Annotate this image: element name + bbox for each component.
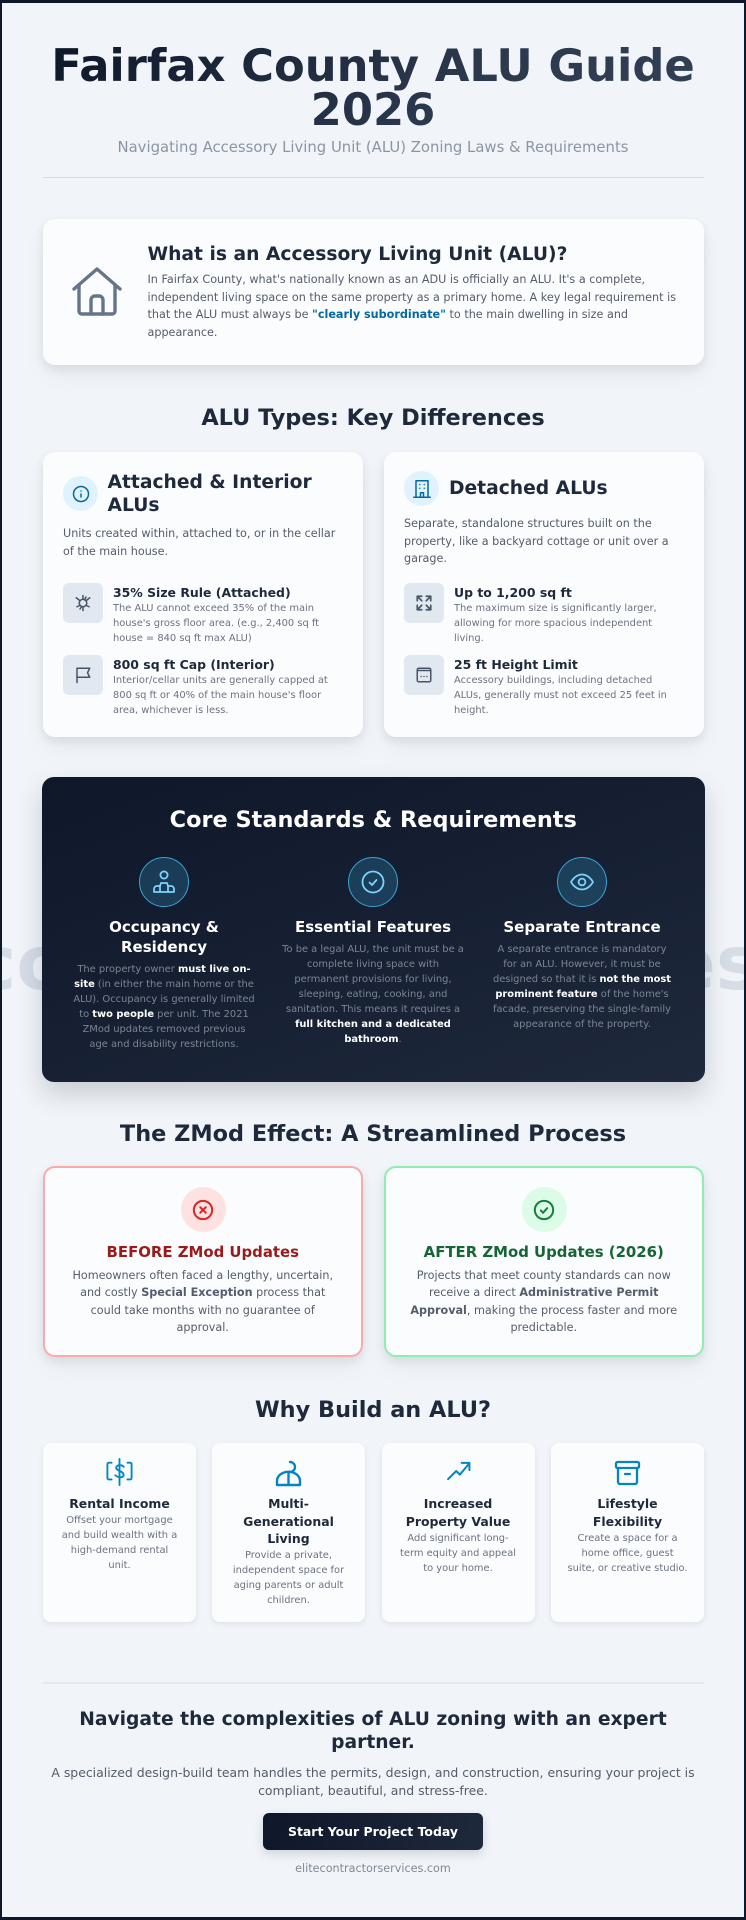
column: essential features [282,857,464,1045]
card text: approval. [177,1321,229,1334]
rule text [113,675,328,716]
rule text: living. [454,633,484,644]
heading: Core Standards & Requirements [170,807,577,833]
benefit text: Create a space for a [577,1533,678,1544]
benefit card: rental income [43,1443,196,1622]
panel: attached and interior ALUs [43,452,362,737]
rule title: 800 sq ft Cap (Interior) [113,657,275,672]
column title [109,918,219,956]
card text: could take months with no guarantee of [91,1304,315,1316]
column text: full kitchen and a dedicated [295,1019,451,1030]
rule text: 800 sq ft or 40% of the main house's floor [113,690,321,701]
benefit title [593,1496,662,1528]
heading: ZMod effect: The ZMod Effect: A Streamlined Process [120,1121,626,1147]
heading: Attached & Interior [108,472,312,493]
benefit title [406,1496,510,1528]
benefit text: Add significant long- [407,1533,509,1544]
panel: before ZMod [42,1166,363,1357]
benefit text: term equity and appeal [400,1548,516,1559]
column text: A separate entrance is mandatory [498,944,666,955]
column text: to two people per unit. The 2021 [79,1009,249,1020]
benefit text: suite, or creative studio. [568,1563,687,1574]
description: Separate, standalone structures built on the [404,517,652,530]
call to action heading: partner. [331,1732,415,1753]
benefit text [62,1515,177,1571]
benefit title: Rental Income [69,1496,170,1511]
heading: why build: Why Build an ALU? [255,1397,491,1423]
title [51,38,695,136]
column text: sleeping, eating, cooking, and [299,989,447,1000]
column text: To be a legal ALU, the unit must be a [282,944,464,955]
panel: what is an ALU [43,219,704,365]
card text: Approval, making the process faster and more [410,1304,677,1316]
benefit title: Lifestyle [597,1496,658,1511]
benefit text: unit. [108,1560,131,1571]
description: garage. [404,552,447,565]
rule title: 25 ft Height Limit [454,657,578,672]
rule: interior cap [63,655,328,716]
benefit text: aging parents or adult [234,1580,343,1591]
description: appearance. [148,326,217,338]
rule text [454,603,657,644]
heading: ALUs [108,494,160,516]
rule title: Up to 1,200 sq ft [454,585,572,600]
card text: Homeowners often faced a lengthy, uncertain, [72,1268,333,1282]
column text: age and disability restrictions. [89,1039,239,1050]
description: of the main house. [63,544,168,558]
heading [108,472,312,516]
call to action heading: Navigate the complexities of ALU zoning with an expert [79,1709,667,1730]
description [404,517,669,565]
icon: eye [557,857,607,907]
heading: ALU types: ALU Types: Key Differences [201,405,545,431]
benefit title: Multi- [268,1496,309,1511]
rule text: height. [454,705,489,716]
rule: size rule [63,583,319,644]
rule text: The maximum size is significantly larger, [454,603,657,614]
benefit text: home office, guest [581,1548,674,1559]
benefit text: high-demand rental [71,1545,168,1556]
icon: height box [404,655,444,695]
column text: complete living space with [307,959,439,970]
card text: Projects that meet county standards can now [417,1268,671,1282]
icon: dollar [106,1458,133,1486]
column title: Separate Entrance [503,918,661,936]
benefit text [400,1533,516,1574]
column text: permanent provisions for living, [294,974,452,985]
icon: info circle [63,476,98,511]
call to action text [51,1765,695,1798]
column: occupancy [73,857,255,1050]
column text: bathroom. [344,1034,402,1045]
benefit text: independent space for [233,1565,344,1576]
benefit card: property value [382,1443,534,1622]
benefit text: Provide a private, [245,1550,332,1561]
benefit title: Property Value [406,1514,510,1528]
description: Units created within, attached to, or in the cellar [63,527,335,540]
benefit text [233,1550,344,1606]
column title: Residency [121,938,207,956]
benefit text: to your home. [423,1563,493,1574]
benefit card: lifestyle [551,1443,704,1622]
benefit card: multi-generational [212,1443,365,1622]
description: property, like a backyard cottage or unit over a [404,534,669,548]
benefit text [568,1533,687,1574]
panel: after ZMod [384,1166,704,1357]
benefit text: and build wealth with a [62,1530,177,1541]
call to action text: compliant, beautiful, and stress-free. [258,1782,488,1798]
card text [72,1268,333,1334]
card text: predictable. [510,1321,577,1334]
column text: designed so that it is not the most [493,974,671,985]
rule text: Accessory buildings, including detached [454,675,652,686]
rule text: area, whichever is less. [113,705,229,716]
column text: facade, preserving the single-family [493,1004,671,1015]
column text [73,964,255,1050]
icon: x circle [180,1187,226,1232]
column title: Occupancy & [109,918,219,936]
column text: ALU). Occupancy is generally limited [73,994,255,1005]
column text: prominent feature of the home's [495,989,669,1000]
icon: check circle [522,1187,566,1232]
icon: trending up [447,1462,470,1480]
benefit title: Flexibility [593,1514,662,1528]
column title: Essential Features [295,918,451,936]
call to action heading [79,1709,667,1753]
rule title: 35% Size Rule (Attached) [113,585,291,600]
card title: BEFORE ZMod Updates [107,1243,299,1261]
column: separate entrance [493,857,671,1030]
panel: detached ALUs [384,452,704,737]
panel: core standards [42,777,704,1082]
icon: flag [63,655,103,695]
column text: site (in either the main home or the [74,979,254,990]
rule text: allowing for more spacious independent [454,618,652,629]
column text [493,944,671,1030]
rule: height limit [404,655,667,716]
rule text: ALUs, generally must not exceed 25 feet in [454,690,667,701]
rule text: house = 840 sq ft max ALU) [113,633,252,644]
description: that the ALU must always be "clearly subordinate" to the main dwelling in size and [148,308,628,321]
icon: size rule [63,583,103,623]
icon: house [72,267,122,316]
heading: What is an Accessory Living Unit (ALU)? [148,244,567,265]
card text: receive a direct Administrative Permit [429,1286,659,1299]
website url: elitecontractorservices.com [295,1862,451,1875]
rule text: Interior/cellar units are generally capped at [113,675,328,686]
button: Start Your Project Today [288,1824,458,1839]
column text: sanitation. This means it requires a [286,1004,460,1015]
icon: archive box [614,1460,640,1486]
benefit title: Increased [424,1496,492,1511]
title: Fairfax County ALU Guide [51,38,695,92]
description [148,273,676,338]
benefit title: Generational [243,1514,334,1528]
rule text [454,675,667,716]
column text: The property owner must live on- [77,964,251,975]
title: 2026 [311,82,435,136]
description: In Fairfax County, what's nationally known as an ADU is officially an ALU. It's a complete, [148,273,645,286]
icon: building [404,471,439,506]
footer divider [43,1682,704,1684]
column text: appearance of the property. [513,1019,651,1030]
column text: ZMod updates removed previous [83,1024,245,1035]
benefit title [243,1496,334,1546]
column text: for an ALU. However, it must be [503,959,661,970]
heading: Detached ALUs [449,478,608,499]
card text [410,1268,677,1334]
benefit text: Offset your mortgage [66,1515,173,1526]
rule text: The ALU cannot exceed 35% of the main [113,603,314,614]
icon: person [139,857,189,907]
description: independent living space on the same property as a primary home. A key legal requirement is [148,290,676,304]
icon: check circle [348,857,398,907]
rule: max size [404,583,657,644]
benefit text: children. [267,1595,310,1606]
call to action text: A specialized design-build team handles the permits, design, and construction, ensuring your project is [51,1765,695,1780]
icon: expand arrows [404,583,444,623]
rule text [112,603,319,644]
subtitle: Navigating Accessory Living Unit (ALU) Zoning Laws & Requirements [117,138,629,156]
card text: and costly Special Exception process that [80,1286,325,1299]
benefit title: Living [267,1531,310,1546]
card title: AFTER ZMod Updates (2026) [424,1243,664,1261]
icon: people [276,1460,302,1486]
description [63,527,336,558]
button [263,1813,483,1850]
rule text: house's gross floor area. (e.g., 2,400 sq ft [113,618,319,629]
header divider [43,177,704,178]
column text [282,944,464,1045]
